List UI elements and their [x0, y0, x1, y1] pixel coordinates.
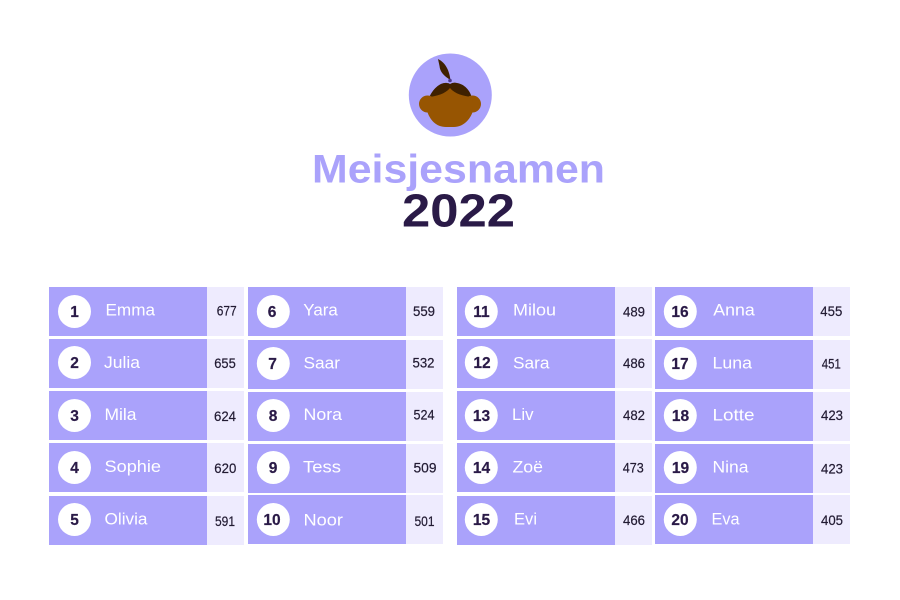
row 15 Evi: 15	[473, 512, 490, 529]
row 2 Julia: 2	[70, 355, 79, 372]
row 18 Lotte: 18	[672, 408, 689, 425]
title: Meisjesnamen: Meisjesnamen	[312, 148, 605, 192]
row 17 Luna: Luna	[712, 354, 753, 373]
row 11 Milou: 11	[473, 304, 490, 321]
row 6 Yara: 6	[268, 304, 277, 321]
row 16 Anna	[655, 287, 850, 336]
row 3 Mila: 624	[214, 409, 236, 424]
row 9 Tess: 9	[269, 460, 278, 477]
row 7 Saar: 532	[412, 355, 434, 370]
row 12 Sara	[457, 339, 652, 388]
row 9 Tess	[248, 444, 443, 493]
row 5 Olivia: 5	[70, 512, 79, 529]
row 7 Saar	[248, 340, 443, 389]
row 2 Julia: 655	[214, 356, 236, 371]
table column: ranks 16 to 20	[655, 287, 850, 544]
row 9 Tess: Tess	[303, 458, 341, 477]
row 19 Nina: 423	[821, 461, 843, 476]
row 3 Mila	[49, 391, 244, 440]
row 8 Nora	[248, 392, 443, 441]
row 20 Eva: 405	[821, 513, 843, 528]
row 12 Sara: 486	[623, 356, 645, 371]
row 4 Sophie	[49, 443, 244, 492]
table column: ranks 1 to 5	[49, 287, 244, 545]
row 16 Anna: 16	[671, 304, 689, 321]
row 19 Nina: 19	[672, 460, 689, 477]
row 20 Eva	[655, 495, 850, 544]
row 3 Mila: 3	[70, 408, 79, 425]
row 9 Tess: 509	[414, 460, 436, 475]
row 17 Luna	[655, 340, 850, 389]
row 17 Luna: 17	[671, 356, 689, 373]
row 4 Sophie: 620	[214, 461, 236, 476]
row 4 Sophie: 4	[70, 460, 79, 477]
row 13 Liv: Liv	[512, 405, 534, 424]
row 15 Evi: 466	[623, 513, 645, 528]
row 18 Lotte: Lotte	[712, 406, 754, 424]
row 11 Milou: Milou	[513, 301, 556, 320]
row 16 Anna: Anna	[713, 301, 755, 320]
table column: ranks 11 to 15	[457, 287, 652, 545]
row 6 Yara: Yara	[303, 301, 338, 320]
row 13 Liv: 482	[623, 408, 645, 423]
row 20 Eva: Eva	[712, 509, 740, 528]
row 3 Mila: Mila	[104, 405, 137, 424]
row 8 Nora: 524	[414, 407, 435, 422]
row 14 Zoë: 473	[623, 460, 644, 475]
row 7 Saar: 7	[268, 356, 277, 373]
row 12 Sara: 12	[473, 355, 491, 372]
row 10 Noor: Noor	[304, 511, 343, 530]
row 16 Anna: 455	[820, 304, 842, 319]
row 13 Liv	[457, 391, 652, 440]
row 12 Sara: Sara	[513, 353, 550, 372]
row 5 Olivia	[49, 496, 244, 545]
row 4 Sophie: Sophie	[104, 457, 161, 476]
row 8 Nora: 8	[269, 408, 278, 425]
row 20 Eva: 20	[671, 512, 689, 529]
row 14 Zoë: Zoë	[512, 458, 543, 477]
row 1 Emma: 1	[70, 304, 79, 321]
row 7 Saar: Saar	[304, 354, 340, 373]
row 6 Yara	[248, 287, 443, 336]
row 1 Emma	[49, 287, 244, 336]
row 11 Milou: 489	[623, 305, 645, 320]
table column: ranks 6 to 10	[248, 287, 443, 544]
row 1 Emma: 677	[217, 304, 237, 319]
row 8 Nora: Nora	[304, 405, 343, 424]
row 14 Zoë	[457, 443, 652, 492]
row 5 Olivia: 591	[215, 514, 235, 529]
row 17 Luna: 451	[822, 356, 841, 371]
row 19 Nina: Nina	[712, 458, 749, 477]
row 2 Julia: Julia	[104, 353, 141, 372]
row 15 Evi	[457, 496, 652, 545]
row 10 Noor: 501	[414, 514, 434, 529]
row 11 Milou	[457, 287, 652, 336]
row 13 Liv: 13	[473, 408, 490, 425]
row 6 Yara: 559	[413, 304, 435, 319]
row 5 Olivia: Olivia	[104, 510, 148, 529]
title: year 2022: 2022	[402, 185, 515, 237]
row 10 Noor	[248, 495, 443, 544]
icon: baby head	[409, 54, 492, 136]
row 15 Evi: Evi	[514, 509, 537, 528]
row 19 Nina	[655, 444, 850, 493]
row 18 Lotte	[655, 392, 850, 441]
row 2 Julia	[49, 339, 244, 388]
row 18 Lotte: 423	[821, 408, 843, 423]
row 14 Zoë: 14	[473, 460, 490, 477]
row 1 Emma: Emma	[106, 301, 156, 320]
row 10 Noor: 10	[263, 512, 281, 529]
